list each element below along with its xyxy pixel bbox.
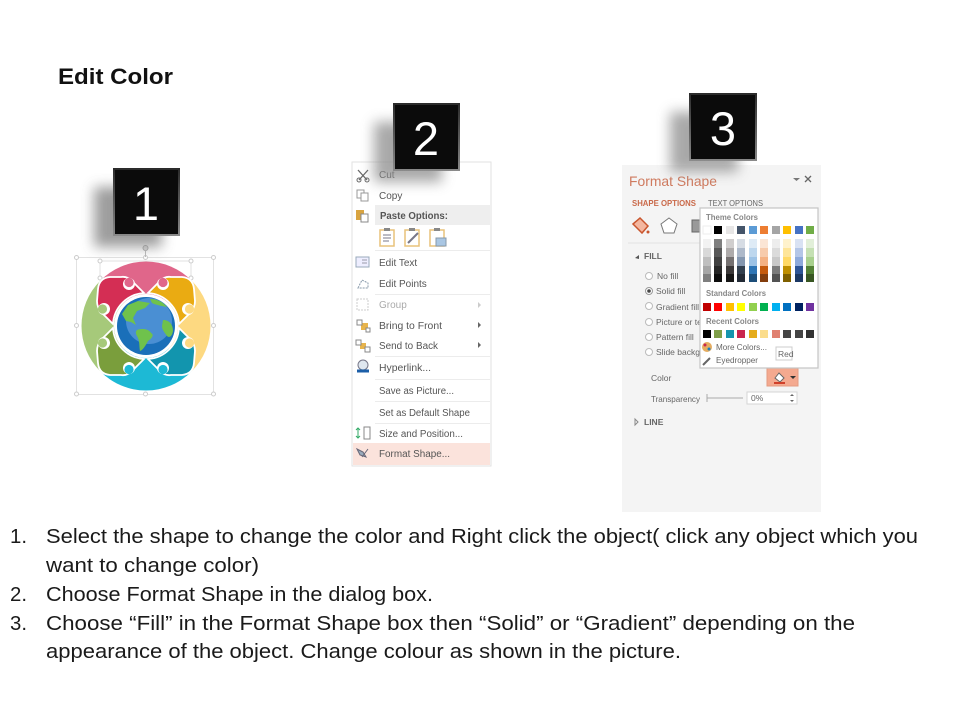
transparency control bbox=[651, 392, 797, 404]
fill section: Pattern fill bbox=[656, 332, 694, 342]
transparency control: 0% bbox=[751, 393, 764, 403]
badge 1: 1 bbox=[133, 177, 159, 230]
recent colours row bbox=[703, 330, 814, 338]
fill section: FILL bbox=[644, 251, 662, 261]
menu icons bbox=[356, 170, 446, 457]
color control: Color bbox=[651, 373, 671, 383]
panel: step 3 format shape pane bbox=[622, 165, 821, 512]
line section bbox=[635, 417, 664, 427]
puzzle circle bbox=[82, 261, 210, 391]
instructions list: 3. bbox=[10, 613, 27, 635]
instructions list: appearance of the object. Change colour as shown in the picture. bbox=[46, 641, 681, 663]
pane icons bbox=[628, 218, 700, 243]
badge 3: 3 bbox=[710, 102, 736, 155]
tooltip: red: Red bbox=[778, 349, 794, 359]
menu labels: Bring to Front bbox=[379, 321, 442, 332]
line section: LINE bbox=[644, 417, 664, 427]
menu labels: Size and Position... bbox=[379, 429, 463, 440]
pane tabs: SHAPE OPTIONS bbox=[632, 198, 696, 208]
badge 2 bbox=[374, 103, 460, 182]
menu labels: Save as Picture... bbox=[379, 386, 454, 397]
menu labels: Hyperlink... bbox=[379, 363, 431, 374]
menu labels bbox=[379, 170, 470, 460]
instructions list: 1. bbox=[10, 526, 27, 548]
menu labels: Paste Options: bbox=[380, 211, 448, 222]
panel: step 1 puzzle globe graphic bbox=[74, 246, 216, 396]
menu labels: Edit Points bbox=[379, 279, 427, 290]
menu arrows bbox=[478, 302, 481, 348]
format shape highlight bbox=[353, 443, 490, 465]
selection handles bbox=[74, 246, 216, 396]
theme colour shades bbox=[703, 239, 814, 282]
transparency control: Transparency bbox=[651, 394, 701, 404]
color control bbox=[651, 368, 798, 386]
fill section: Gradient fill bbox=[656, 302, 699, 312]
color picker popup: Theme Colors bbox=[706, 212, 758, 222]
more colors and eyedropper: Eyedropper bbox=[716, 355, 758, 365]
panel: step 2 context menu bbox=[352, 162, 491, 466]
color picker popup bbox=[700, 208, 818, 368]
more colors and eyedropper: More Colors... bbox=[716, 342, 767, 352]
paste options highlight bbox=[375, 205, 490, 225]
icon: globe bbox=[114, 294, 178, 358]
panel: step 3 format shape pane: TEXT OPTIONS bbox=[708, 198, 763, 208]
fill section: Picture or te bbox=[656, 317, 702, 327]
standard colours row bbox=[703, 303, 814, 311]
instructions list: want to change color) bbox=[45, 555, 259, 577]
fill section: Slide backgr bbox=[656, 347, 703, 357]
puzzle knobs bbox=[98, 278, 194, 374]
pane close controls bbox=[793, 176, 811, 182]
instructions list bbox=[10, 526, 918, 663]
tooltip: red bbox=[776, 347, 794, 360]
title: Edit Color bbox=[58, 64, 173, 89]
badge 3 bbox=[670, 93, 757, 172]
fill section bbox=[635, 251, 703, 357]
theme colour row bbox=[703, 226, 814, 234]
instructions list: Choose Format Shape in the dialog box. bbox=[46, 584, 433, 606]
fill section: Solid fill bbox=[656, 286, 685, 296]
menu labels: Format Shape... bbox=[379, 449, 450, 460]
instructions list: Select the shape to change the color and Right click the object( click any object which you bbox=[46, 526, 918, 548]
instructions list: Choose “Fill” in the Format Shape box then “Solid” or “Gradient” depending on the bbox=[46, 613, 855, 635]
badge 1 bbox=[94, 168, 180, 247]
menu labels: Edit Text bbox=[379, 258, 417, 269]
menu labels: Set as Default Shape bbox=[379, 408, 470, 419]
fill section: No fill bbox=[657, 271, 678, 281]
menu labels: Cut bbox=[379, 170, 395, 181]
color picker popup: Recent Colors bbox=[706, 316, 759, 326]
badge 2: 2 bbox=[413, 112, 439, 165]
color picker popup: Standard Colors bbox=[706, 288, 766, 298]
pane title: Format Shape bbox=[629, 173, 717, 189]
menu labels: Group bbox=[379, 300, 407, 311]
menu labels: Copy bbox=[379, 191, 402, 202]
instructions list: 2. bbox=[10, 584, 27, 606]
menu labels: Send to Back bbox=[379, 341, 439, 352]
more colors and eyedropper bbox=[702, 342, 767, 365]
